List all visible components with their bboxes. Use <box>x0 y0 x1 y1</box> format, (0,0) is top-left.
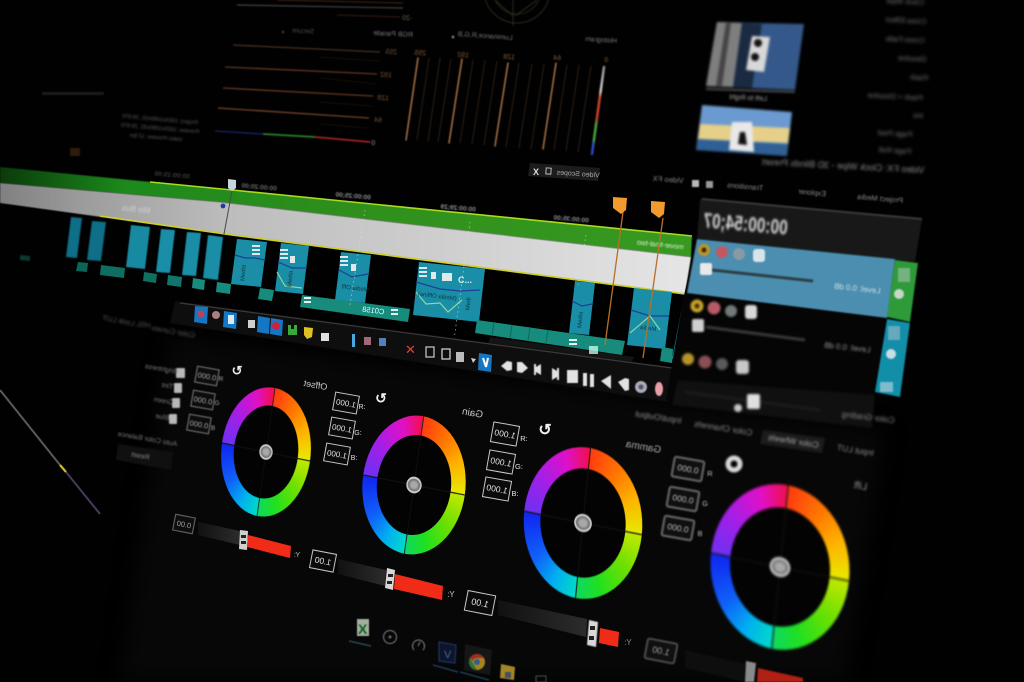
scope tab labels <box>282 27 617 45</box>
selected track <box>687 239 918 397</box>
color wheel: gamma <box>517 436 649 610</box>
lift value boxes: 0.000 <box>666 521 689 535</box>
options checklist: Green <box>153 396 173 407</box>
track band: yellow underline <box>100 216 685 294</box>
effects caption: Video FX: Clock Wipe - 3D Blinds Preset <box>761 157 925 175</box>
taskbar icons <box>349 619 546 682</box>
lift value boxes: 0.000 <box>671 492 694 506</box>
offset value boxes: 0.000 <box>197 370 217 383</box>
histogram axis numbers: 128 <box>503 54 515 61</box>
panel: color grading background <box>120 335 885 682</box>
gain value boxes: R: <box>358 404 366 411</box>
histogram chart <box>406 58 604 154</box>
lift luminance slider: 1.00 <box>651 644 671 658</box>
histogram axis numbers: 192 <box>457 52 469 59</box>
options checklist: Brightness <box>144 363 178 376</box>
dotted edit markers <box>350 210 586 340</box>
gain value boxes: 1.000 <box>335 397 357 410</box>
track band: green video bus <box>0 167 692 257</box>
third track controls <box>682 353 895 425</box>
gamma value boxes: G: <box>515 462 523 471</box>
icon: folder <box>500 664 515 680</box>
track band: bright top edge <box>150 182 692 236</box>
clip icons and labels: (Media Offline) <box>417 292 457 302</box>
gain value boxes: 1.000 <box>326 448 348 461</box>
color wheel: gain <box>354 406 474 564</box>
gamma title: Gamma <box>625 439 662 456</box>
RGB parade axis numbers <box>371 49 397 147</box>
options checklist: Blue <box>155 413 170 422</box>
clip icons and labels: Media <box>577 311 585 328</box>
offset value boxes <box>187 366 224 434</box>
toolbar strip <box>170 301 672 402</box>
gamma value boxes: 1.000 <box>489 455 512 469</box>
track band: white title clip <box>0 183 691 294</box>
icon: small utility <box>536 676 546 682</box>
offset luminance slider: Y: <box>294 552 300 559</box>
offset value boxes: 0.000 <box>189 418 209 431</box>
tabs: color grading panel: Color Wheels <box>767 432 819 450</box>
toolbar dots far left <box>42 92 104 156</box>
thumbnail: lighthouse preview <box>696 105 792 156</box>
gain reset icon: ↻ <box>375 390 387 406</box>
gamma luminance slider <box>464 591 632 647</box>
gain luminance slider <box>310 550 455 600</box>
clip icons and labels: Medi <box>465 297 473 311</box>
lift value boxes <box>661 457 713 540</box>
window tabs row: Explorer <box>797 187 827 198</box>
gain luminance slider: 1.00 <box>314 554 332 567</box>
clip icons and labels: Media <box>240 264 248 281</box>
orange marker lines and flags <box>605 197 665 358</box>
teal video clips <box>20 217 690 360</box>
options checklist: Reset <box>131 451 150 462</box>
project stats text: Preview: 1920x1080x32, 29.970 <box>121 123 199 135</box>
project stats text: Project: 1920x1080x32, 29.970 <box>122 114 198 126</box>
offset value boxes: G <box>214 400 220 407</box>
scope tab labels: Secure <box>292 27 314 36</box>
scope tab labels: Luminance,R,G,B <box>457 31 513 42</box>
clip icons and labels: Media <box>287 270 295 287</box>
toolbar top edge <box>180 303 672 368</box>
ruler timecodes: 00:00:25;00 <box>335 191 371 202</box>
gain value boxes: B: <box>351 455 357 462</box>
effects list <box>867 0 929 156</box>
audio clip label: C0158 <box>362 305 385 316</box>
right panel: mixer background <box>666 239 895 420</box>
audio clip segment dividers <box>492 322 548 343</box>
clip fade curves <box>235 255 669 316</box>
color wheel: lift <box>703 471 857 663</box>
clip icons and labels <box>240 245 657 333</box>
offset luminance slider: 0.00 <box>176 519 192 530</box>
gamma luminance slider: 1.00 <box>470 596 490 610</box>
icon: spreadsheet app <box>349 619 371 646</box>
track button icons <box>698 244 765 262</box>
diagonal stylus <box>0 390 100 514</box>
offset value boxes: R <box>219 376 224 383</box>
green audio clips <box>76 262 673 363</box>
third track controls: Color Grading <box>841 409 895 425</box>
project stats text <box>121 114 199 143</box>
clip icons and labels: Media <box>639 325 657 333</box>
gamma value boxes: B: <box>511 489 519 498</box>
toolbar icons <box>194 306 492 372</box>
tabs: left color curves: HSL <box>135 319 151 330</box>
gamma value boxes: 1.000 <box>493 427 516 441</box>
effects list: Flash <box>910 73 929 82</box>
icon: V app: V <box>444 649 452 661</box>
track label: band title: Mix Bus <box>122 204 151 215</box>
ruler timecodes: 00:00:15;00 <box>154 170 190 181</box>
histogram axis numbers: 255 <box>414 50 426 57</box>
gamma value boxes: R: <box>520 434 528 443</box>
icon: speed dial circle <box>384 630 396 644</box>
options checklist: Tint <box>161 382 173 391</box>
thumbnail caption: Left to Right <box>729 94 767 103</box>
clip icons and labels: Media Offl <box>341 284 369 294</box>
right panel: timecode header <box>697 199 922 262</box>
lift value boxes: R <box>707 469 713 478</box>
RGB parade axis numbers: 192 <box>380 72 392 79</box>
tab: video scopes: Video Scopes <box>556 169 600 179</box>
effects list: Cross Effect <box>885 15 927 26</box>
gain title: Gain <box>461 406 484 421</box>
second track controls <box>690 300 871 354</box>
tabs: left color curves: Color Curves <box>151 323 196 340</box>
RGB parade axis numbers: 0 <box>371 140 375 147</box>
RGB parade axis numbers: 255 <box>385 49 397 56</box>
vectorscope <box>484 0 550 26</box>
ruler timecodes <box>154 170 589 225</box>
effects list: Iris <box>913 111 923 120</box>
scope tab labels: Histogram <box>585 36 617 45</box>
audio clip label <box>304 297 598 354</box>
tabs: color grading panel: Input/Output <box>634 408 682 426</box>
top scope traces: -20 <box>402 15 412 22</box>
tab: video scopes <box>528 163 600 181</box>
histogram axis numbers: 0 <box>604 57 608 64</box>
color wheel: offset <box>213 379 319 525</box>
gamma reset icon: ↻ <box>538 422 552 439</box>
window tabs row <box>653 174 903 205</box>
gamma value boxes <box>482 422 528 501</box>
options checklist <box>116 363 185 470</box>
gain value boxes: G: <box>354 430 362 437</box>
options checklist: Auto Color Balance <box>117 431 178 448</box>
lift value boxes: G <box>702 499 708 508</box>
playback transport controls <box>501 361 663 396</box>
icon: spreadsheet app: X <box>358 621 368 637</box>
window tabs row: Video FX <box>653 174 684 185</box>
effects list: Dissolve <box>898 53 927 64</box>
RGB parade chart <box>215 45 380 142</box>
gain value boxes <box>324 392 366 465</box>
lift title: Lift <box>853 480 868 493</box>
lift luminance slider <box>644 638 803 682</box>
scope tab labels: RGB Parade <box>373 30 413 39</box>
tabs: left color curves <box>101 313 196 340</box>
panel: video scopes <box>42 0 617 156</box>
right panel: lower track strip <box>672 380 875 428</box>
icon: V app <box>433 642 458 672</box>
tabs: color grading panel: Input LUT <box>836 442 875 458</box>
thumbnail: film strip preview <box>706 22 804 92</box>
lift reset icon <box>728 458 740 470</box>
track label: green end text: movie-final-two <box>636 240 684 251</box>
ruler timecodes: 00:00:29;29 <box>440 203 476 214</box>
offset value boxes: 0.000 <box>193 394 213 407</box>
project stats text: Video Preview: 12 fps <box>129 133 183 143</box>
gamma value boxes: 1.000 <box>485 482 508 496</box>
icon: gauge <box>412 640 424 650</box>
tab: video scopes: X <box>533 167 539 177</box>
tabs: color grading panel: Color Channels <box>694 419 753 438</box>
effects list: Page Roll <box>878 145 912 156</box>
toolbar icons: ✕ <box>405 342 416 357</box>
offset reset icon: ↻ <box>232 363 242 378</box>
selected track: Level: 0.0 dB <box>834 282 881 295</box>
RGB parade axis numbers: 64 <box>374 117 382 124</box>
gain luminance slider: Y: <box>447 590 455 599</box>
second track controls: Level: 0.0 dB <box>824 341 871 354</box>
effects list: Page Peel <box>877 128 913 139</box>
timeline ruler <box>154 170 589 225</box>
offset value boxes: B <box>211 425 215 432</box>
tabs: left color curves: Look LUT <box>101 313 135 328</box>
window tabs row: Transitions <box>726 180 764 193</box>
histogram axis numbers <box>414 50 608 64</box>
clip keyframe curves <box>277 272 660 333</box>
effects list: Cross Fade <box>886 34 925 45</box>
RGB parade axis numbers: 128 <box>377 95 389 102</box>
offset luminance slider <box>173 514 300 559</box>
timecode header bar line <box>702 199 922 219</box>
offset title: Offset <box>302 378 328 392</box>
ruler timecodes: 00:00:35;00 <box>553 214 589 225</box>
histogram axis numbers: 64 <box>553 55 561 62</box>
icon: browser <box>460 644 492 680</box>
ruler timecodes: 00:00:20;00 <box>241 182 277 193</box>
playhead <box>221 179 236 234</box>
top scope traces <box>237 0 412 22</box>
timecode readout: 00:00:54;07 <box>703 208 789 239</box>
lift value boxes: 0.000 <box>676 462 699 476</box>
effects list: Flash + Dissolve <box>867 91 923 102</box>
gain value boxes: 1.000 <box>331 422 353 435</box>
tabs: color grading panel <box>634 408 875 458</box>
gamma luminance slider: Y: <box>624 638 632 647</box>
lift value boxes: B <box>697 529 703 538</box>
clip icons and labels: C... <box>458 275 472 285</box>
window tabs row: Project Media <box>856 192 903 205</box>
